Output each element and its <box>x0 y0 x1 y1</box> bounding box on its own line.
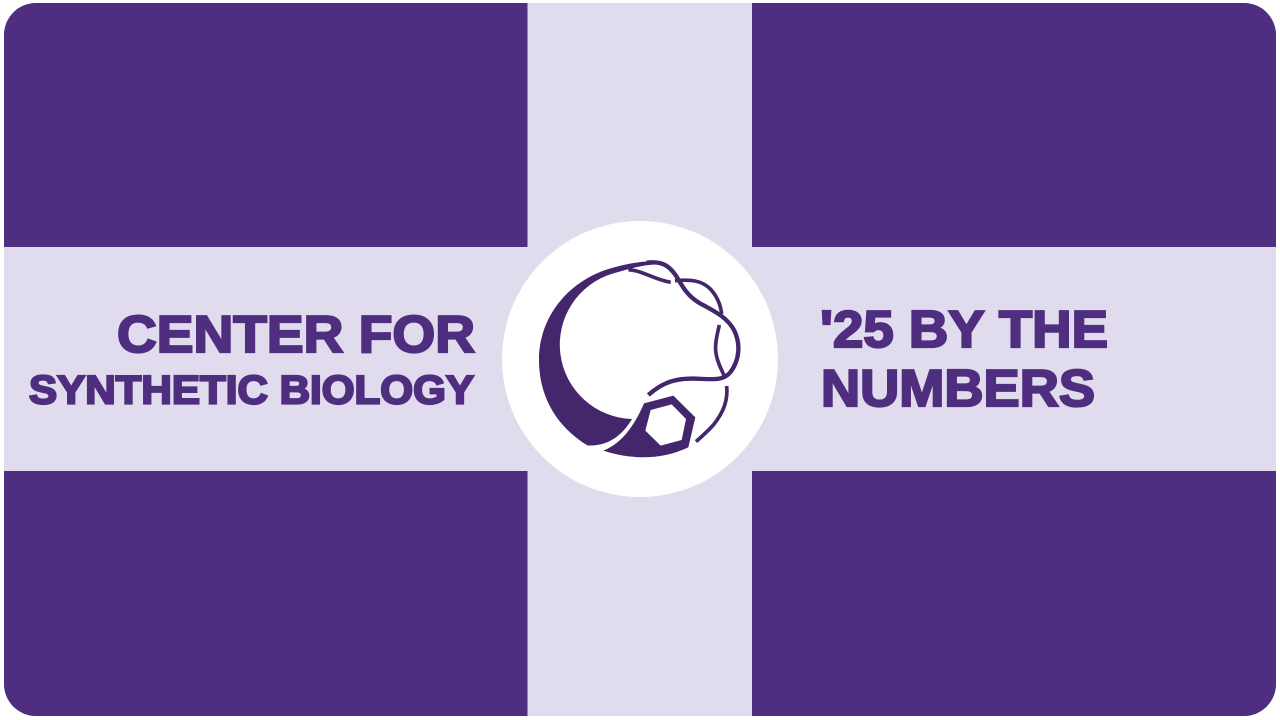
icon: synthetic biology cell logo <box>539 261 738 457</box>
heading: by the numbers <box>820 301 1108 418</box>
heading line: numbers: NUMBERS <box>821 360 1095 418</box>
logo membrane strands <box>628 262 738 442</box>
heading line: center for: CENTER FOR <box>117 306 475 364</box>
heading: organisation name <box>29 306 475 412</box>
logo crescent <box>539 261 657 445</box>
heading line: 25 by the: '25 BY THE <box>820 301 1108 359</box>
heading line: synthetic biology: SYNTHETIC BIOLOGY <box>29 368 474 412</box>
panel: bottom right <box>752 471 1276 716</box>
logo badge circle <box>502 221 778 497</box>
panel: top right <box>752 3 1276 247</box>
logo hexagon nucleus <box>603 396 695 457</box>
panel: bottom left <box>4 471 528 716</box>
panel: top left <box>4 3 528 247</box>
